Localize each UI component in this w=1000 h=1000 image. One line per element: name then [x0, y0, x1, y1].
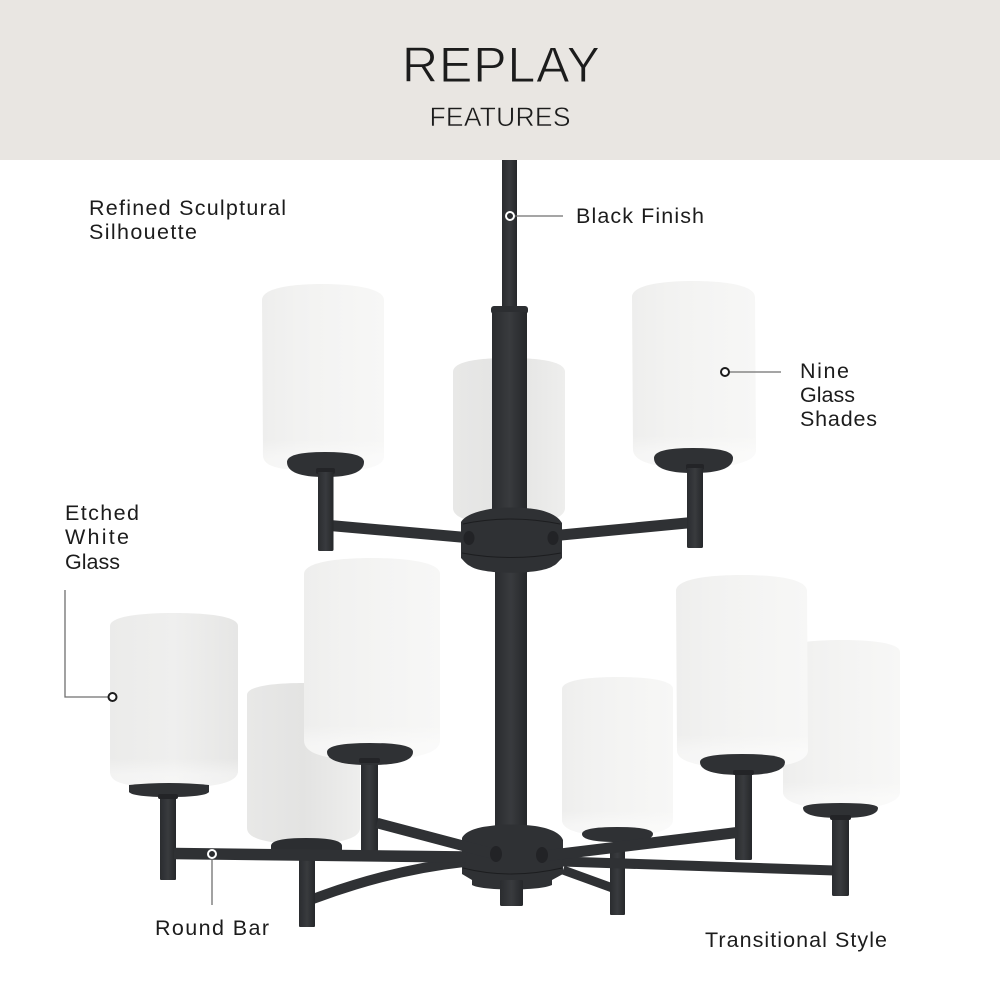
callout: Black Finish: [506, 204, 704, 228]
stem: upper rod: [502, 160, 517, 306]
arm right to hub: [536, 832, 737, 863]
long arm left: [174, 854, 466, 857]
finial: [500, 880, 523, 906]
lower hub: [462, 824, 563, 890]
callout: Transitional Style: Transitional Style: [705, 928, 887, 952]
shade: lower mid right: [676, 575, 808, 765]
callout: Round Bar: [155, 850, 269, 940]
upper hub: [461, 508, 562, 573]
title: REPLAY: [402, 37, 600, 93]
callout: Round Bar: Round Bar: [155, 916, 269, 940]
upper stem right: [687, 465, 703, 548]
subtitle: FEATURES: [430, 102, 570, 132]
callout: Etched White Glass: Etched: [65, 501, 139, 525]
cup: far left: [129, 783, 209, 799]
callout: Nine Glass Shades: Shades: [800, 407, 877, 431]
callout: Etched White Glass: White: [65, 525, 129, 549]
cup: mid left: [327, 743, 413, 765]
callout: Nine Glass Shades: Nine: [800, 359, 849, 383]
shade: upper left: [262, 284, 384, 469]
stems and arms: lower right: [562, 770, 849, 915]
cup: inner right: [582, 827, 653, 842]
shade: lower inner right: [562, 677, 673, 836]
shade: lower mid left: [304, 558, 440, 757]
shade: lower inner left: [247, 683, 360, 844]
shade: lower far left: [110, 613, 238, 786]
callout: Refined Sculptural Silhouette: Refined Sculptural: [89, 196, 286, 220]
stem: upper sleeve: [491, 306, 528, 512]
arm left to hub: [377, 823, 502, 862]
callout: Black Finish: Black Finish: [576, 204, 704, 228]
shade: upper right: [632, 281, 756, 465]
stem: central column: [495, 568, 527, 833]
stems and arms: lower left: [160, 760, 464, 927]
cup: mid right: [700, 754, 785, 775]
callout: Refined Sculptural Silhouette: Silhouette: [89, 220, 197, 244]
upper stem left: [318, 470, 334, 551]
shade: top centre: [453, 358, 565, 524]
callout: Refined Sculptural Silhouette: [89, 196, 286, 244]
upper arms: [330, 522, 692, 538]
header band: [0, 0, 1000, 160]
callout: Nine Glass Shades: [721, 359, 877, 431]
shade: lower far right: [783, 640, 900, 809]
cup: upper right: [654, 448, 733, 488]
chandelier product image: [110, 160, 900, 927]
callout: Etched White Glass: [65, 501, 139, 701]
cup: inner left: [271, 838, 342, 850]
cup: far right: [803, 803, 878, 820]
callout: Nine Glass Shades: Glass: [800, 383, 855, 407]
callout: Etched White Glass: Glass: [65, 550, 120, 574]
cup: upper left: [287, 452, 364, 492]
